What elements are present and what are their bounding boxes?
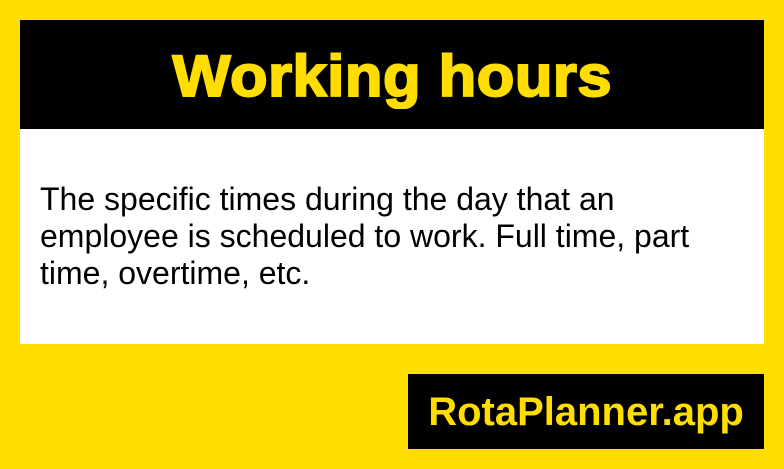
definition text: employee is scheduled to work. Full time, part: [40, 218, 689, 254]
definition text: The specific times during the day that an: [40, 181, 615, 217]
panel: definition: [20, 129, 764, 344]
brand badge: RotaPlanner.app: [428, 390, 744, 434]
title banner: Working hours: [172, 44, 612, 109]
brand badge: [408, 374, 764, 449]
definition text: [40, 181, 689, 291]
title banner: [20, 20, 764, 129]
definition text: time, overtime, etc.: [40, 255, 310, 291]
